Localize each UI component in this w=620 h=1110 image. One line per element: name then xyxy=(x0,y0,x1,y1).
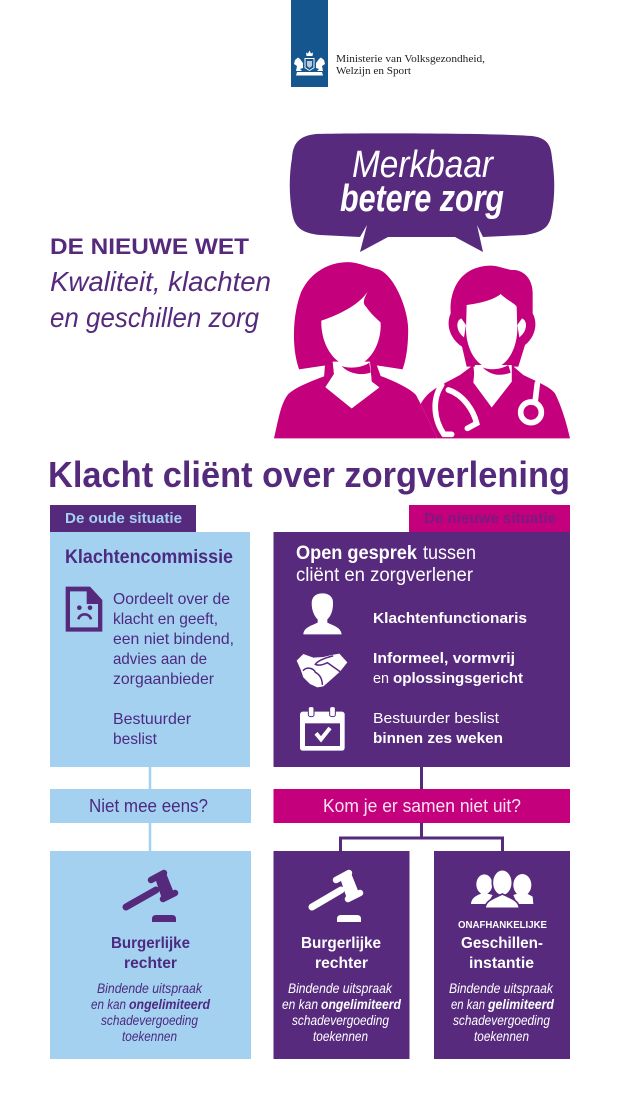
text: bindende uitspraak: toekennen xyxy=(122,1029,177,1044)
text: bindende uitspraak xyxy=(91,981,211,1044)
text: bindende uitspraak: Bindende uitspraak xyxy=(97,981,203,996)
text: bindende uitspraak: en kan xyxy=(282,997,318,1012)
text: bindende uitspraak: schadevergoeding xyxy=(453,1013,550,1028)
text: bindende uitspraak: ongelimiteerd xyxy=(321,997,402,1012)
text: bindende uitspraak: Bindende uitspraak xyxy=(449,981,554,996)
panel text: klacht en geeft, xyxy=(113,611,218,628)
speech bubble xyxy=(290,133,554,252)
text: burgerlijke rechter: Burgerlijke xyxy=(301,935,381,952)
tab: de oude situatie: De oude situatie xyxy=(65,510,182,527)
question bar: niet mee eens xyxy=(50,789,251,823)
row text: informeel xyxy=(373,650,523,687)
text: burgerlijke rechter: rechter xyxy=(124,955,177,972)
heading: de nieuwe wet: DE NIEUWE WET xyxy=(50,234,250,259)
row text: bestuurder xyxy=(373,710,503,747)
panel: nieuwe situatie xyxy=(274,532,570,767)
text: bindende uitspraak xyxy=(449,981,555,1044)
icon: stethoscope xyxy=(435,383,541,434)
panel text: beslist xyxy=(113,731,158,748)
text: burgerlijke rechter: rechter xyxy=(315,955,368,972)
main heading: Klacht cliënt over zorgverlening xyxy=(48,454,570,495)
icon: person xyxy=(303,593,342,634)
row text: informeel: oplossingsgericht xyxy=(393,670,523,687)
panel: burgerlijke rechter oud xyxy=(50,851,251,1059)
question bar: kom je er samen niet uit: Kom je er samen niet uit? xyxy=(323,796,521,816)
text: bindende uitspraak: schadevergoeding xyxy=(101,1013,198,1028)
panel: burgerlijke rechter nieuw xyxy=(274,851,410,1059)
icon: three people xyxy=(471,870,533,908)
row text: informeel: Informeel, vormvrij xyxy=(373,650,515,667)
text: burgerlijke rechter: Burgerlijke xyxy=(111,935,190,952)
logo: Rijksoverheid ribbon with emblem xyxy=(291,0,328,87)
doctor xyxy=(421,266,570,438)
text: onafhankelijke: ONAFHANKELIJKE xyxy=(458,920,547,931)
icon: gavel xyxy=(126,873,176,922)
text: burgerlijke rechter xyxy=(111,935,190,972)
text: bindende uitspraak: Bindende uitspraak xyxy=(288,981,393,996)
panel heading: Open gesprek xyxy=(296,543,417,564)
icon: sad document xyxy=(66,587,102,632)
row text: bestuurder: Bestuurder beslist xyxy=(373,710,500,727)
bubble text xyxy=(340,144,504,220)
icon: gavel xyxy=(312,873,361,922)
tab: de nieuwe situatie xyxy=(409,505,570,532)
panel: oude situatie xyxy=(50,532,250,767)
heading: de nieuwe wet xyxy=(50,234,271,333)
woman xyxy=(274,261,437,438)
panel heading: tussen xyxy=(423,543,476,564)
panel text: zorgaanbieder xyxy=(113,671,215,688)
illustration: client and care provider xyxy=(274,261,570,438)
tab: de nieuwe situatie: De nieuwe situatie xyxy=(424,510,556,527)
icon: calendar xyxy=(300,707,345,751)
tab: de oude situatie xyxy=(50,505,196,532)
ministry name xyxy=(336,54,485,77)
ministry name: Welzijn en Sport xyxy=(336,66,411,77)
question bar: niet mee eens: Niet mee eens? xyxy=(89,796,208,816)
text: bindende uitspraak: en kan xyxy=(91,997,126,1012)
bubble text: Merkbaar xyxy=(352,144,494,186)
text: burgerlijke rechter xyxy=(301,935,381,972)
text: bindende uitspraak: toekennen xyxy=(474,1029,529,1044)
panel text xyxy=(113,591,234,748)
question bar: kom je er samen niet uit xyxy=(274,789,570,823)
row text: bestuurder: binnen zes weken xyxy=(373,730,503,747)
subtitle: en geschillen zorg xyxy=(50,302,259,333)
text: bindende uitspraak xyxy=(282,981,402,1044)
row text: informeel: en xyxy=(373,670,389,687)
ministry name: Ministerie van Volksgezondheid, xyxy=(336,54,485,65)
subtitle: Kwaliteit, klachten xyxy=(50,266,271,297)
panel heading: Klachtencommissie xyxy=(65,547,233,568)
text: bindende uitspraak: toekennen xyxy=(313,1029,368,1044)
text: geschillen-instantie: Geschillen- xyxy=(461,935,543,952)
row text: klachtenfunctionaris: Klachtenfunctionaris xyxy=(373,610,527,627)
text: bindende uitspraak: ongelimiteerd xyxy=(129,997,211,1012)
icon: handshake xyxy=(297,654,347,687)
subtitle xyxy=(50,266,271,333)
panel text: Bestuurder xyxy=(113,711,192,728)
text: bindende uitspraak: schadevergoeding xyxy=(292,1013,389,1028)
panel text: een niet bindend, xyxy=(113,631,234,648)
icon: emblem xyxy=(294,50,325,76)
panel: geschilleninstantie xyxy=(434,851,570,1059)
panel heading xyxy=(296,543,476,586)
text: geschillen-instantie: instantie xyxy=(469,955,534,972)
connector: nieuwe situatie xyxy=(340,767,502,851)
panel heading: cliënt en zorgverlener xyxy=(296,565,474,586)
text: geschillen-instantie xyxy=(461,935,543,972)
connector: oude situatie xyxy=(149,767,151,851)
panel text: advies aan de xyxy=(113,651,207,668)
panel text: Oordeelt over de xyxy=(113,591,230,608)
bubble text: betere zorg xyxy=(340,178,504,220)
text: bindende uitspraak: en kan xyxy=(451,997,485,1012)
text: bindende uitspraak: gelimiteerd xyxy=(487,997,555,1012)
